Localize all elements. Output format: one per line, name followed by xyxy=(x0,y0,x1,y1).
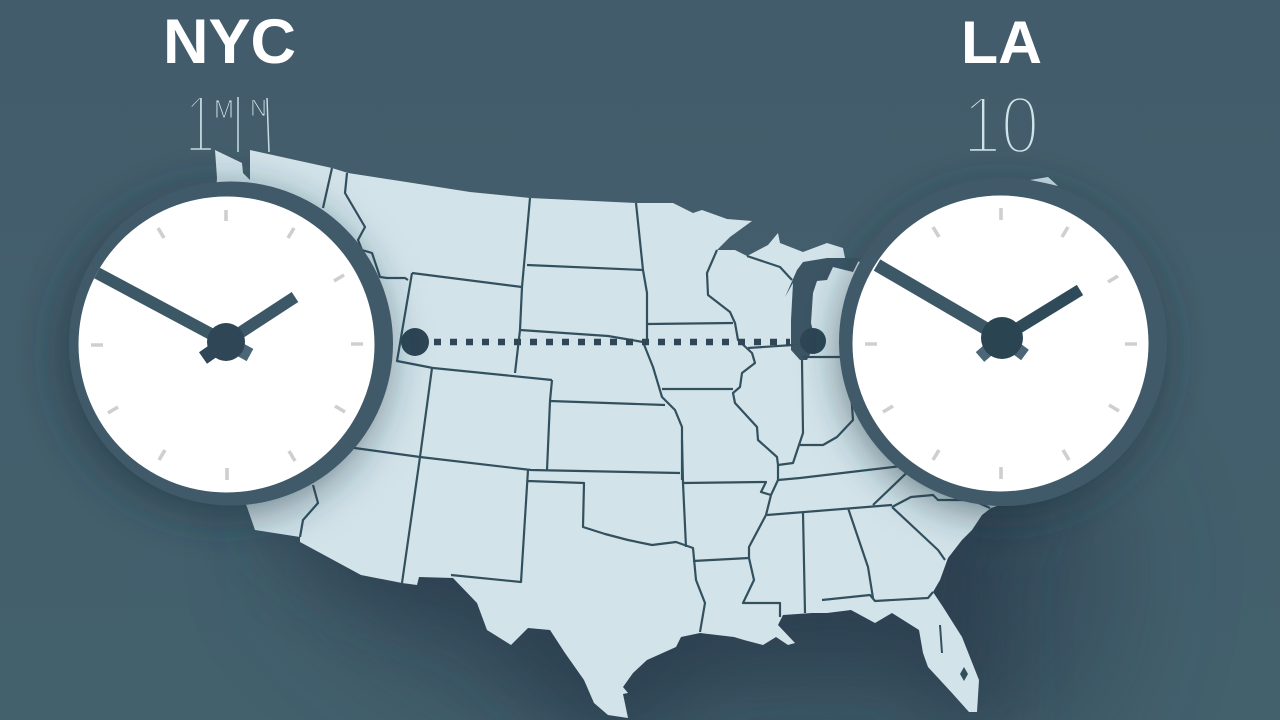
hand tails xyxy=(203,342,226,358)
hour hand xyxy=(226,297,295,342)
hub xyxy=(981,317,1023,359)
minute hand xyxy=(97,273,226,342)
clock face xyxy=(78,196,374,492)
Great Lakes xyxy=(785,258,860,360)
clock face xyxy=(852,196,1148,492)
wide ambient shadow xyxy=(280,440,1130,720)
marker: LA xyxy=(800,328,826,354)
clock bezel xyxy=(839,178,1167,506)
state borders xyxy=(300,168,990,632)
clock: LA xyxy=(839,178,1167,506)
marker: NYC xyxy=(401,328,429,356)
hand tails xyxy=(980,338,1025,357)
hub xyxy=(207,323,245,361)
garbled NYC time: N xyxy=(250,95,267,122)
garbled NYC time xyxy=(185,79,269,170)
Florida lake xyxy=(939,625,968,681)
garbled NYC time: 1 xyxy=(185,79,215,170)
land mass xyxy=(200,150,1000,718)
hour ticks xyxy=(865,208,1137,479)
hour ticks xyxy=(91,210,363,480)
map of the United States xyxy=(200,150,1058,718)
dotted route between cities xyxy=(401,328,826,356)
hour hand xyxy=(1002,290,1080,338)
clock bezel xyxy=(69,182,393,506)
island above the LA clock xyxy=(1030,177,1058,186)
garbled NYC time: M xyxy=(214,94,234,124)
minute hand xyxy=(877,265,1002,338)
LA time: 10 xyxy=(963,80,1039,171)
land shadow xyxy=(250,420,1030,720)
clock: NYC xyxy=(69,182,393,506)
heading: NYC: NYC xyxy=(163,7,296,77)
heading: LA: LA xyxy=(961,9,1042,76)
